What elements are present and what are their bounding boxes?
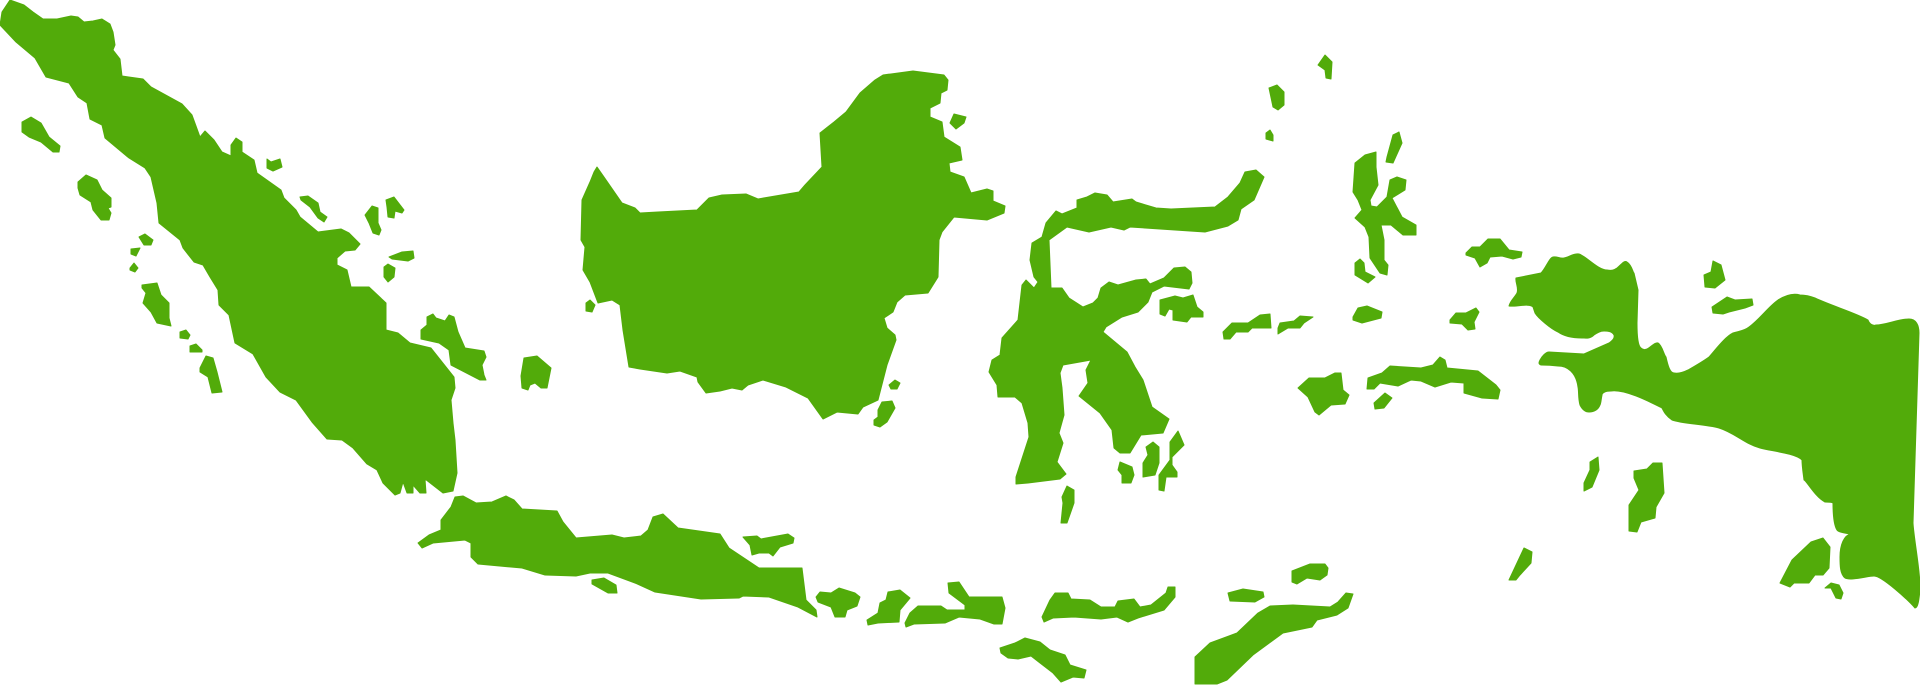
island: Madura	[743, 534, 794, 556]
islands: Sula	[1223, 314, 1313, 339]
island: Sumatra	[0, 0, 457, 495]
islands: Muna and Buton	[1118, 431, 1184, 491]
island: Bali	[816, 588, 860, 617]
islands: Banggai	[1160, 295, 1203, 322]
islands: Mentawai south	[180, 330, 222, 393]
island: Belitung	[521, 356, 551, 390]
islands: Riau	[267, 159, 404, 235]
island: south of Dolak	[1825, 583, 1843, 599]
island: Maratua	[950, 114, 966, 129]
islands: Kei	[1584, 457, 1664, 532]
island: Yamdena	[1509, 548, 1532, 580]
islands: Sangihe and Talaud	[1266, 55, 1332, 141]
islands: Laut	[874, 380, 900, 427]
island: Papua	[1509, 254, 1920, 608]
island: Dolak	[1780, 538, 1830, 587]
island: Bangka	[421, 314, 486, 380]
island: Ambon	[1374, 393, 1392, 409]
island: Alor	[1228, 589, 1264, 602]
island: Halmahera	[1353, 152, 1416, 275]
islands: Lingga and Singkep	[384, 251, 414, 282]
island: Waigeo	[1704, 261, 1725, 288]
island: Bacan	[1355, 259, 1375, 283]
island: Siberut	[142, 283, 171, 326]
island: Selayar	[1061, 486, 1074, 523]
island: Morotai	[1386, 132, 1402, 163]
island: Nias	[78, 175, 111, 220]
island: Simeulue	[22, 117, 60, 152]
islands: Moluccas north small	[1353, 306, 1479, 330]
island: Karimata	[586, 300, 595, 312]
island: Java	[418, 496, 817, 617]
island: Kalimantan	[581, 71, 1005, 419]
island: Timor	[1195, 593, 1353, 684]
islands: Batu group	[130, 234, 153, 272]
island: Flores	[1042, 587, 1175, 622]
island: Wetar	[1292, 564, 1328, 584]
island: Sulawesi	[989, 170, 1264, 484]
island: Obi	[1466, 239, 1522, 267]
island: Buru	[1298, 373, 1349, 415]
island: Lombok	[867, 590, 910, 625]
island: Seram	[1367, 357, 1500, 399]
island: Sumba	[1000, 638, 1086, 682]
island: Biak	[1712, 297, 1753, 314]
island: Nusa Barung	[592, 578, 617, 593]
island: Sumbawa	[905, 582, 1005, 627]
